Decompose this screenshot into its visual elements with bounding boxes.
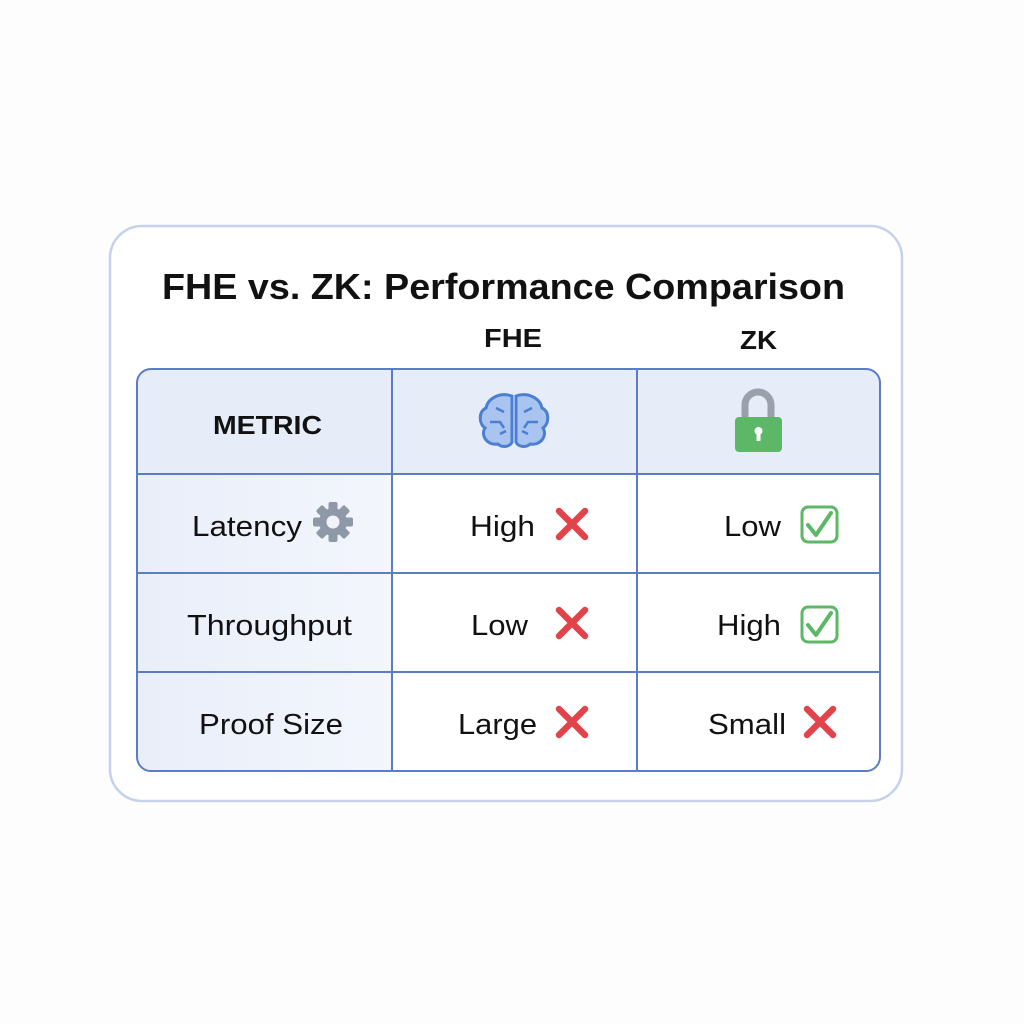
row: Throughput: [187, 610, 781, 642]
row: Proof Size: [199, 709, 786, 741]
row: Throughput: High: [717, 610, 781, 642]
row: Proof Size: Proof Size: [199, 709, 343, 741]
panel: outer card: [110, 226, 902, 801]
comparison table: [137, 369, 880, 771]
column label: FHE: FHE: [484, 323, 542, 353]
row: Latency: Low: [724, 511, 782, 543]
row: Latency: Latency: [192, 511, 303, 543]
icons: green checkboxes: [802, 507, 837, 642]
icon: padlock: [735, 392, 782, 452]
title: FHE vs. ZK: Performance Comparison: [162, 266, 845, 307]
icons: red crosses: [559, 511, 833, 735]
row: Throughput: Low: [471, 610, 529, 642]
row: Proof Size: Large: [458, 709, 537, 741]
icon: brain: [480, 395, 548, 446]
row: Latency: High: [470, 511, 535, 543]
icon: gear: [313, 502, 353, 542]
header: METRIC: METRIC: [213, 410, 322, 440]
column label: ZK: ZK: [740, 325, 777, 355]
row: Proof Size: Small: [708, 709, 786, 741]
row: Latency: [192, 502, 782, 543]
row: Throughput: Throughput: [187, 610, 352, 642]
